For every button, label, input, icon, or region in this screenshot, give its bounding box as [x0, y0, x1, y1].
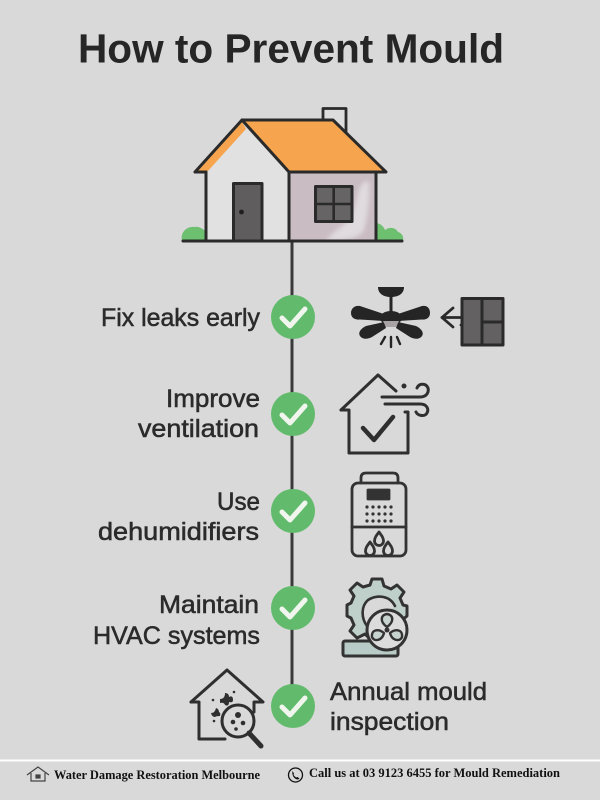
step 4 label: Maintain [159, 591, 259, 619]
step 2 label [138, 385, 260, 443]
step 3 label: dehumidifiers [98, 518, 259, 546]
right wall with stains [289, 172, 376, 241]
step 3 label [98, 488, 260, 546]
step 1 label: Fix leaks early [101, 304, 260, 332]
step 5 label [330, 678, 487, 736]
window [316, 186, 352, 222]
timeline line [290, 241, 294, 695]
fan light rays [381, 337, 400, 347]
step 3 label: Use [217, 488, 260, 516]
step 5 check [271, 684, 315, 728]
step 4 check [271, 586, 315, 630]
icon: small house [27, 767, 49, 781]
icon: HVAC gear and fan [343, 579, 407, 656]
icon: airflow arrow [442, 308, 473, 328]
left wall [206, 124, 289, 241]
step 2 check [271, 392, 315, 436]
step 3 check [271, 489, 315, 533]
orange left eave [197, 122, 246, 172]
icon: house with wind [341, 375, 428, 453]
footer divider [0, 760, 600, 762]
house walls [206, 172, 376, 241]
control dots [365, 505, 393, 523]
icon: phone [288, 768, 302, 782]
step 4 label: HVAC systems [93, 622, 260, 650]
roof outline [195, 120, 242, 172]
bushes [182, 223, 403, 241]
step 5 label: Annual mould [330, 678, 487, 706]
fan icon [372, 614, 402, 640]
step 2 label: ventilation [138, 415, 259, 443]
mould spots [211, 691, 245, 731]
icon: ceiling fan [351, 287, 430, 347]
icon: house [182, 108, 403, 241]
fan blades [351, 306, 384, 321]
door [234, 184, 262, 241]
step 4 label [93, 591, 260, 650]
orange roof [242, 120, 386, 172]
icon: house inspection [191, 670, 263, 746]
footer: company: Water Damage Restoration Melbourne [54, 768, 260, 782]
title: How to Prevent Mould [78, 26, 504, 72]
ground [183, 240, 402, 242]
drops [374, 532, 384, 546]
icon: window [462, 298, 503, 345]
step 5 label: inspection [330, 708, 449, 736]
chimney [323, 108, 346, 132]
icon: dehumidifier [352, 473, 406, 556]
step 2 label: Improve [166, 385, 260, 413]
step 1 check [271, 295, 315, 339]
footer: phone: Call us at 03 9123 6455 for Mould Remediation [309, 766, 560, 780]
